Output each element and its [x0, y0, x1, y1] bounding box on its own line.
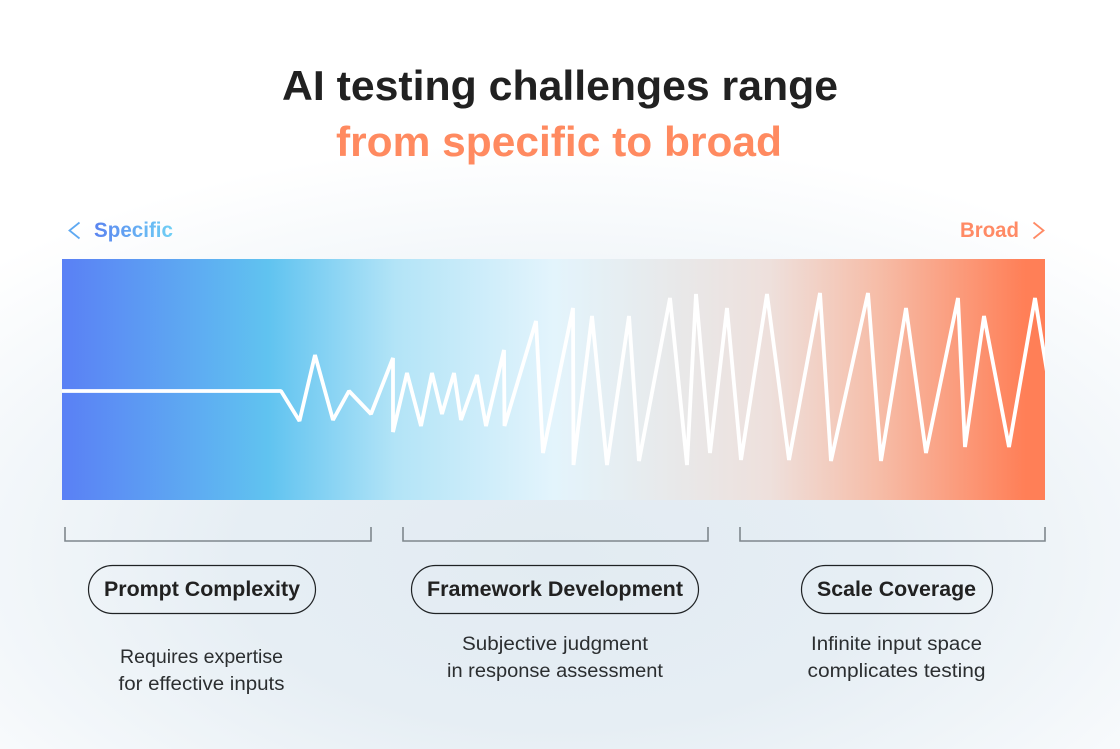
description: scale coverage: complicates testing: [808, 661, 986, 682]
description: framework development: [447, 634, 664, 682]
pill: scale coverage: [802, 566, 992, 614]
title: from specific to broad: [336, 118, 782, 165]
label: broad: Broad: [960, 219, 1019, 242]
description: prompt complexity: Requires expertise: [120, 647, 283, 668]
pill: scale coverage: Scale Coverage: [817, 578, 976, 601]
bracket: framework development: [403, 527, 708, 541]
description: scale coverage: [808, 634, 986, 682]
description: prompt complexity: [118, 647, 284, 695]
description: scale coverage: Infinite input space: [811, 634, 982, 655]
pill: prompt complexity: Prompt Complexity: [104, 578, 300, 601]
pill: prompt complexity: [88, 566, 316, 614]
description: framework development: Subjective judgment: [462, 634, 649, 655]
title: [282, 62, 838, 165]
bracket: prompt complexity: [65, 527, 371, 541]
pill: framework development: [412, 566, 698, 614]
description: prompt complexity: for effective inputs: [118, 674, 284, 695]
description: framework development: in response assessment: [447, 661, 664, 682]
label: specific: Specific: [94, 219, 173, 242]
waveform line: [62, 293, 1048, 465]
gradient spectrum bar with waveform: [62, 259, 1048, 500]
pill: framework development: Framework Development: [427, 578, 683, 601]
bracket: scale coverage: [740, 527, 1045, 541]
title: AI testing challenges range: [282, 62, 838, 109]
